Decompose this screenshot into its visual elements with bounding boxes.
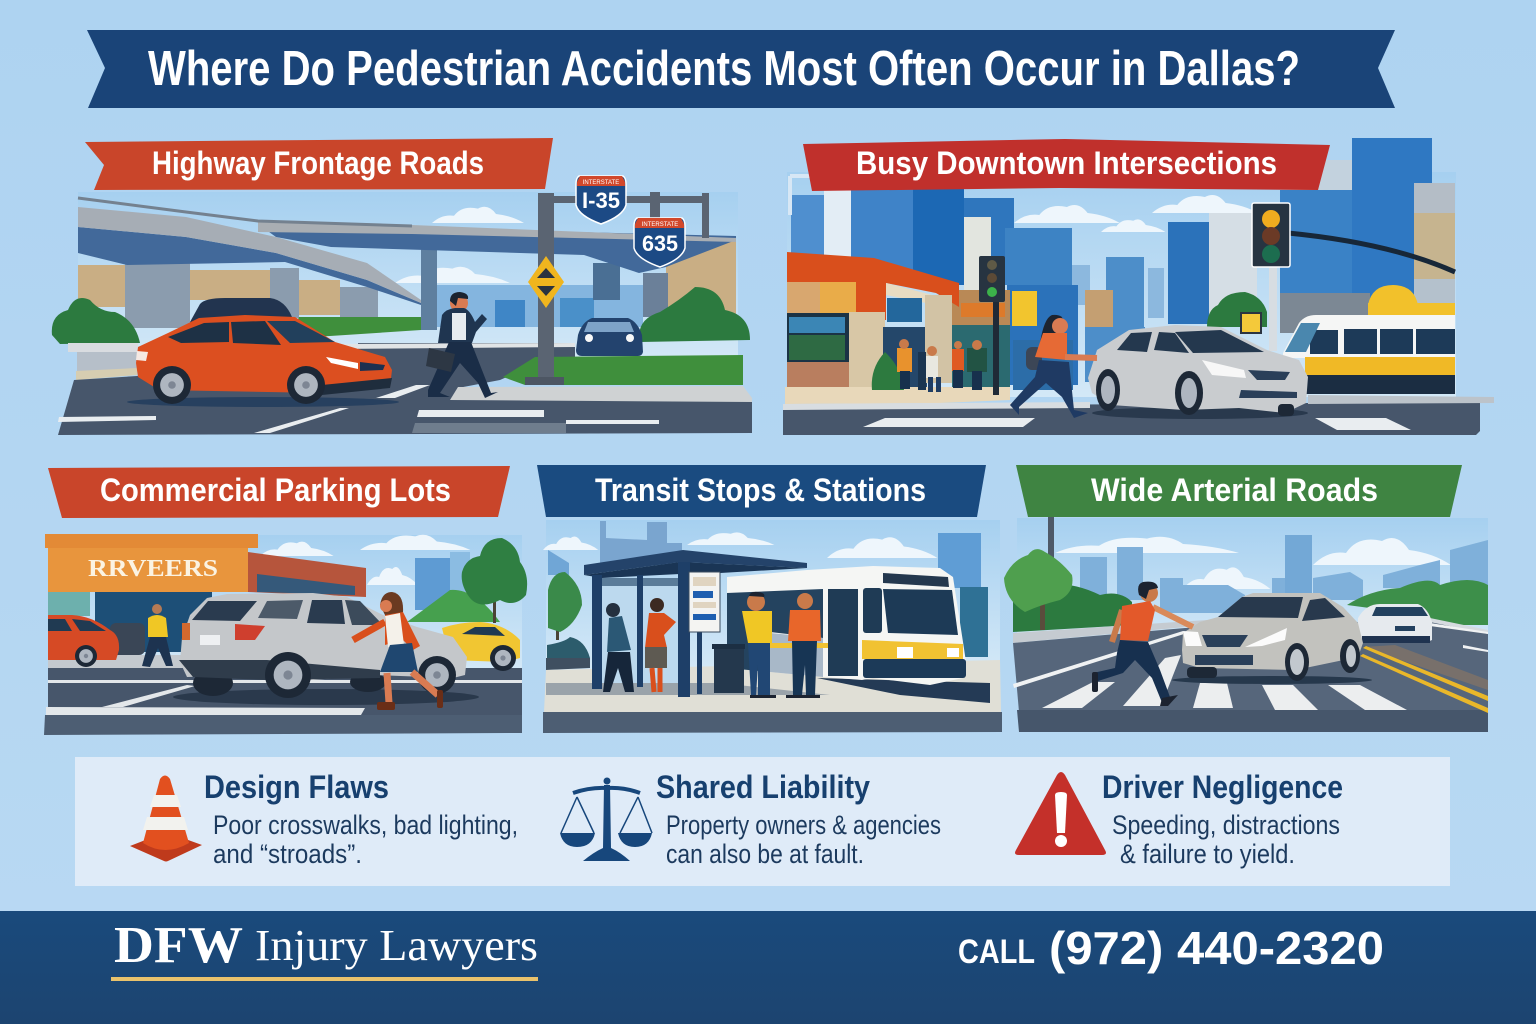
panel: wide arterial roads xyxy=(1004,517,1488,732)
tan walls xyxy=(78,240,736,317)
bus xyxy=(727,566,966,685)
back road stripe xyxy=(330,343,575,349)
text: shared liability detail: Property owners & agencies xyxy=(666,810,941,840)
crosswalk xyxy=(1042,655,1407,710)
skyline xyxy=(1080,535,1488,613)
phone call to action: (972) 440-2320 xyxy=(1049,922,1384,974)
red car xyxy=(48,615,119,667)
heading: driver negligence: Driver Negligence xyxy=(1102,769,1343,805)
ribbon: commercial parking lots: Commercial Parking Lots xyxy=(100,472,451,508)
heading: shared liability: Shared Liability xyxy=(656,769,870,805)
rear dark car xyxy=(190,298,292,330)
person: yellow shirt xyxy=(742,592,776,698)
icon: I-35 shield xyxy=(576,176,626,224)
store sign: RRVEERS xyxy=(88,556,218,582)
timetable panel xyxy=(689,572,720,694)
tree and small sign xyxy=(1207,292,1267,333)
text: shared liability detail xyxy=(666,810,941,869)
logo text: Injury Lawyers xyxy=(255,921,538,970)
pedestrian man xyxy=(426,292,498,398)
panel: info strip xyxy=(75,757,1450,886)
yellow car xyxy=(442,622,520,671)
panel: highway frontage roads xyxy=(52,176,752,435)
ribbon: transit stops and stations: Transit Stops & Stations xyxy=(595,472,926,508)
distant car xyxy=(1358,604,1432,643)
road under bus xyxy=(817,678,990,703)
person in yellow xyxy=(142,604,173,667)
clouds xyxy=(543,532,937,558)
yellow road lines xyxy=(1360,646,1488,713)
panel: transit stops and stations xyxy=(543,520,1002,733)
bushes xyxy=(1013,580,1488,632)
road lower band xyxy=(1017,710,1488,732)
road top stripe xyxy=(783,402,1090,410)
back overpass deck xyxy=(258,222,736,273)
store front xyxy=(787,252,1010,390)
icon: traffic cone xyxy=(130,776,202,862)
pedestrian woman with skirt xyxy=(353,592,443,710)
heading: design flaws: Design Flaws xyxy=(204,769,389,805)
bushes xyxy=(407,590,500,622)
crosswalk markings xyxy=(58,385,659,433)
scene sky xyxy=(78,192,738,362)
clouds xyxy=(395,207,524,283)
brown median xyxy=(1363,645,1488,690)
text: design flaws detail xyxy=(213,810,518,869)
icon: yellow diamond sign xyxy=(528,256,564,308)
footer band xyxy=(0,911,1536,1024)
panel: commercial parking lots xyxy=(44,534,527,735)
ribbon: highway frontage roads: Highway Frontage Roads xyxy=(152,145,484,181)
small dark car xyxy=(576,318,643,356)
scene sky xyxy=(1017,518,1488,648)
bridge piers xyxy=(125,248,668,330)
logo text: DFW xyxy=(114,917,243,974)
orange car xyxy=(127,315,399,407)
lot sidewalk xyxy=(48,655,208,669)
small traffic light xyxy=(979,256,1005,395)
sign gantry xyxy=(525,192,709,385)
rear silver car xyxy=(110,623,145,655)
large traffic light xyxy=(1252,203,1455,351)
ribbon: transit stops and stations xyxy=(537,465,986,517)
skyline xyxy=(548,521,981,588)
crossing lines xyxy=(863,418,1411,430)
lane lines xyxy=(1013,623,1488,688)
lamp post xyxy=(1048,517,1054,562)
right kerb xyxy=(1430,618,1488,634)
phone call to action: CALL xyxy=(958,933,1035,971)
tree xyxy=(1004,549,1072,630)
right grass xyxy=(503,355,743,385)
icon: 635 shield xyxy=(634,218,685,267)
sidewalk and wall left xyxy=(68,343,138,380)
scene sky xyxy=(48,535,522,670)
scene sky xyxy=(787,172,1456,397)
lot lower band xyxy=(44,715,522,735)
title: Where Do Pedestrian Accidents Most Often Occur in Dallas? xyxy=(148,42,1300,96)
bushes xyxy=(52,287,750,344)
road strip xyxy=(543,712,1002,733)
sidewalk xyxy=(785,387,1010,404)
skyline xyxy=(790,138,1455,390)
pedestrian woman xyxy=(1010,315,1097,418)
ribbon: busy downtown intersections: Busy Downtown Intersections xyxy=(856,145,1277,181)
city skyline xyxy=(437,285,643,327)
far wall xyxy=(1013,620,1207,643)
bus shelter xyxy=(584,550,807,697)
ribbon: highway frontage roads xyxy=(85,138,553,190)
road xyxy=(1013,620,1488,712)
silver car xyxy=(1172,593,1372,684)
store building xyxy=(45,534,366,652)
crowd xyxy=(872,339,987,392)
tree and background bushes xyxy=(547,572,988,658)
scene sky xyxy=(546,520,1000,670)
text: driver negligence detail: & failure to yield. xyxy=(1120,839,1295,869)
person: red jacket xyxy=(645,598,676,692)
icon: I-35 shield: I-35 xyxy=(582,188,620,213)
far ground xyxy=(546,658,590,670)
silver SUV xyxy=(173,593,479,705)
parking lot xyxy=(48,668,522,715)
icon: 635 shield: 635 xyxy=(642,231,678,256)
trash can xyxy=(712,644,745,693)
panel: busy downtown intersections xyxy=(783,138,1494,435)
road xyxy=(783,403,1480,435)
text: driver negligence detail xyxy=(1112,810,1340,869)
ribbon: busy downtown intersections xyxy=(803,139,1330,191)
text: driver negligence detail: Speeding, distractions xyxy=(1112,810,1340,840)
icon: scales of justice xyxy=(560,778,652,861)
text: design flaws detail: Poor crosswalks, bad lighting, xyxy=(213,810,518,840)
logo text xyxy=(111,917,538,981)
person: dark jacket xyxy=(603,603,634,692)
clouds xyxy=(1014,195,1258,232)
silver car xyxy=(1088,325,1308,419)
text: design flaws detail: and “stroads”. xyxy=(213,839,362,869)
skyline xyxy=(415,552,470,610)
ground xyxy=(544,660,1001,712)
ribbon: wide arterial roads xyxy=(1016,465,1462,517)
running pedestrian xyxy=(1092,582,1193,706)
near sidewalk xyxy=(450,386,752,402)
front ramp xyxy=(78,198,421,305)
icon: 635 shield: INTERSTATE xyxy=(642,222,678,228)
title banner xyxy=(87,30,1395,108)
ribbon: commercial parking lots xyxy=(48,466,510,518)
tram xyxy=(1283,285,1455,394)
tree xyxy=(462,538,527,623)
clouds xyxy=(260,535,470,585)
back grass xyxy=(290,317,421,338)
person: orange shirt xyxy=(786,593,821,698)
text: shared liability detail: can also be at fault. xyxy=(666,839,864,869)
lot lines xyxy=(46,680,522,715)
icon: warning triangle xyxy=(1015,772,1106,855)
clouds xyxy=(1055,537,1451,589)
icon: I-35 shield: INTERSTATE xyxy=(583,180,619,186)
ribbon: wide arterial roads: Wide Arterial Roads xyxy=(1091,472,1378,508)
road xyxy=(58,343,752,435)
tram platform xyxy=(1308,395,1494,404)
